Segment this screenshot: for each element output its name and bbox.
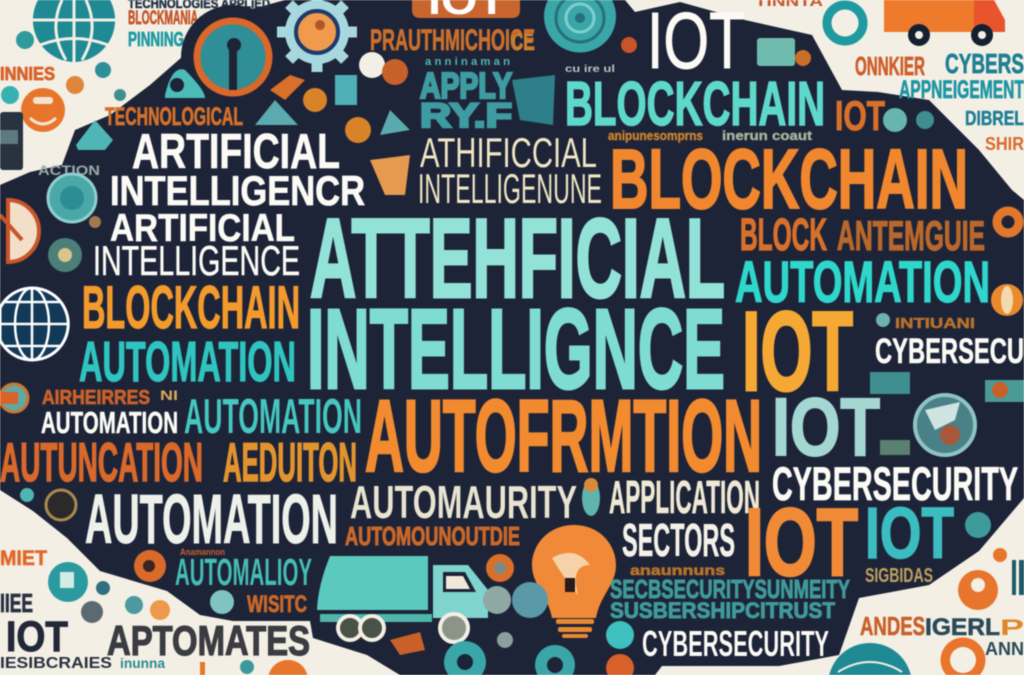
text: small orange and dark labels [0,547,165,672]
icon: teal ring left [48,174,96,222]
text: top left red and teal labels: PINNING [128,29,184,51]
icon: left orange and teal badge [0,384,28,412]
text: small orange and dark labels: inunna [120,655,165,671]
heading: AUTOMATION white large: AUTOMATION [85,480,338,558]
heading: ARTIFICIAL INTELLIGENCE white first: INTELLIGENCR [110,167,365,214]
heading: IOT orange: IOT [745,489,858,596]
text: TECHNOLOGICAL small: TECHNOLOGICAL [105,103,243,131]
icon group: small doodles above heading: ACTION [38,162,100,178]
text: garbled teal block: SUSBERSHIPCITRUST [610,598,836,623]
text: right corner labels [860,611,1024,659]
icon: doodle badge [20,488,76,520]
text: garbled orange mini row: anaunnuns [630,562,725,578]
icon cluster: cream corner top left [0,0,270,170]
text: PRAUTHMICHOICE [370,24,535,68]
text: PRAUTHMICHOICE: PRAUTHMICHOICE [370,24,535,57]
text: small orange row: inerun coaut [722,128,813,143]
icon: orange and teal ring [181,5,285,109]
text: small orange row [608,128,813,143]
heading: ARTIFICIAL INTELLIGENCE white first [110,125,365,214]
icon: orange circle [958,570,998,610]
text: CYBER teal label: ONNKIER [855,51,925,81]
text: small orange row right: INTIUANI [895,315,975,332]
heading: ARTIFICIAL INTELLIGENCE white first: ARTIFICIAL [132,125,340,179]
heading: IOT pale: IOT [772,382,880,473]
icon: bars [993,548,1024,595]
text: SECTORS white: SECTORS [622,514,735,566]
heading: ATTHIFICIAL INTELLIGENUNE cream [418,129,602,212]
icon: small badge [582,478,600,516]
text: small orange and dark labels: IIEE [0,588,33,618]
text: BLOCK orange: BLOCK [740,209,827,260]
text: top left red and teal labels [0,0,270,84]
text: right corner labels: P [1000,615,1024,640]
text: right corner labels: ANDES [860,611,925,641]
icon: teal machine doodle [757,38,811,66]
heading: APTOMATES dark: APTOMATES [107,617,310,664]
text: AUTOMALIOY teal: Anamannon [180,547,225,557]
cluster: lower left cream corner [0,547,310,675]
text: APPLICATION [609,471,760,523]
icon group: small doodles above heading [38,52,410,195]
heading: AUTOMATION teal left: AUTOMATION [79,330,296,394]
icon: lightbulb [532,525,616,638]
cluster: upper right cream corner [755,0,1024,154]
icons: right edge rings [991,211,1023,316]
text: AP RY blocky teal: RY.F [420,97,512,135]
text: AUTOMATIURITY cream: AUTOMAURITY [350,476,577,528]
icon: teal doodle right [965,512,991,538]
icons: doodles beside bulb [512,582,634,675]
heading: ARTIFICIAL INTELLIGENCE white second: ARTIFICIAL [110,207,295,250]
heading: ATTHIFICIAL INTELLIGENUNE cream: ATHIFICCIAL [420,129,597,176]
text: small orange row below [210,590,307,618]
icon: dark block [0,112,23,170]
icon: small doodles [1,31,111,104]
icon: bottom orange ring [941,638,986,675]
cluster: lower right cream corner [829,548,1024,675]
text: right corner labels: ANN [985,639,1024,659]
heading: IOT yellow: IOT [742,289,853,414]
text: SIGBIDAS small: SIGBIDAS [865,565,933,587]
icon: teal truck [317,556,488,642]
text: AUTOMALIOY teal: AUTOMALIOY [175,552,312,594]
icon: teal ring [827,5,863,41]
icon: teal spiral [544,0,616,52]
text: garbled teal block: SECBSECURITYSUNMEITY [610,574,850,604]
icon: bottom teal dome [829,643,911,675]
text: top left red and teal labels: BLOCKMANIA [128,8,198,29]
icon: orange IOT banner [412,0,520,23]
text: small orange and dark labels: IESIBCRAIES [0,655,112,672]
icon: doodles [81,581,170,623]
text: DIBREL teal label [965,108,1024,154]
text: garbled teal block [610,574,850,623]
text: CYBER teal label [855,48,1024,81]
icon: small orange doodle [512,29,637,75]
heading: large ARTIFICIAL mint: ATTEHFICIAL [310,196,725,321]
icon: orange truck [884,0,1005,46]
heading: BLOCKCHAIN yellow-orange left: BLOCKCHAIN [82,274,300,341]
icon: orange ring left [0,200,39,262]
heading: BLOCKCHAIN teal: BLOCKCHAIN [565,70,825,139]
text: AUTUNCATION orange: AUTUNCATION [0,431,203,493]
text: small orange row left: NI [160,387,178,403]
heading: IOT dark: IOT [6,613,68,661]
icon: small orange doodle: CE [512,29,534,56]
icon: earth cluster [870,372,1024,455]
heading: IOT teal: IOT [865,494,954,574]
text: small orange row below: WISITC [247,591,307,618]
text: CYBERSECURITY bottom white: CYBERSECURITY [642,623,829,664]
icon: teal circle [48,562,88,602]
text: small orange and dark labels: MIET [0,547,47,570]
heading: ARTIFICIAL INTELLIGENCE white second [93,207,300,284]
text: small orange row: anipunesomprns [608,128,703,143]
icon: bottom orange circle [200,660,307,675]
text: AUTOMATION small white: AUTOMATION [41,405,178,440]
icon: orange circle [134,550,166,582]
text: garbled orange row: AUTOMOUNOUTDIE [345,521,520,551]
icon: white globe [0,288,68,360]
text: AEDUITON [223,431,357,493]
text: small orange row right [876,313,975,332]
icon: doodles around truck [390,554,514,675]
text: AP RY blocky teal: APPLY [420,65,512,106]
icon: small orange doodle: cu ire ul [565,64,615,75]
text: AUTOMALIOY teal [175,547,312,594]
icon: orange smile circle [21,88,65,132]
icon: small teal badge [165,69,205,98]
text: small orange row left: AIRHEIRRES [42,387,150,409]
text: small IOT orange: IOT [835,92,885,139]
icon: teal globe top left [33,0,115,62]
text: AUTOMATION small teal: AUTOMATION [184,390,362,444]
text: PRAUTHMICHOICE: a n n i n a m a n [425,56,510,68]
icon: swirl doodle [48,216,101,272]
icon: gear [277,0,357,72]
heading: ATTHIFICIAL INTELLIGENUNE cream: INTELLIGENUNE [418,165,602,212]
heading: ARTIFICIAL INTELLIGENCE white second: INTELLIGENCE [93,237,300,284]
text: AP RY blocky teal [420,65,555,135]
text: right corner labels: IGERL [925,614,1000,641]
text: top left red and teal labels: INNIES [0,64,55,84]
